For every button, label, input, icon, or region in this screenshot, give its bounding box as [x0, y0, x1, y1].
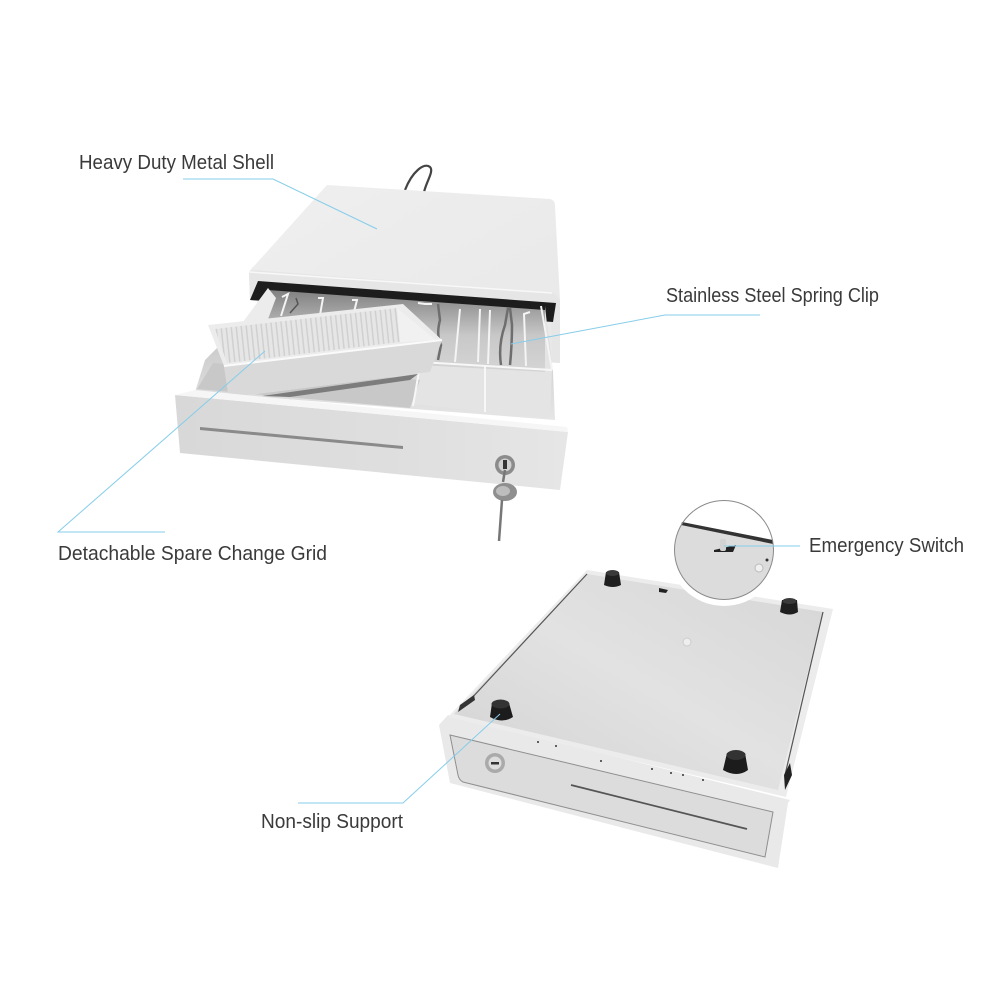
rubber feet — [490, 570, 798, 774]
label: detachable spare change grid: Detachable Spare Change Grid — [58, 543, 327, 565]
inset: emergency switch detail — [668, 494, 780, 606]
product: open cash drawer — [175, 166, 568, 541]
label: stainless steel spring clip: Stainless Steel Spring Clip — [666, 285, 879, 307]
label: emergency switch: Emergency Switch — [809, 535, 964, 557]
front face — [439, 715, 790, 868]
label: non-slip support: Non-slip Support — [261, 811, 403, 833]
drawer front panel — [175, 390, 568, 490]
cable — [405, 166, 431, 200]
plate dots — [537, 741, 704, 781]
lock — [485, 753, 505, 773]
product: cash drawer underside — [439, 570, 833, 868]
lock and key — [493, 455, 517, 541]
metal shell — [249, 185, 560, 363]
base plate — [448, 570, 833, 797]
small switch — [659, 588, 668, 593]
drawer interior with spring clips — [195, 288, 555, 420]
label: heavy duty metal shell: Heavy Duty Metal Shell — [79, 152, 274, 174]
spare change tray — [208, 304, 442, 397]
leader lines — [58, 179, 800, 803]
